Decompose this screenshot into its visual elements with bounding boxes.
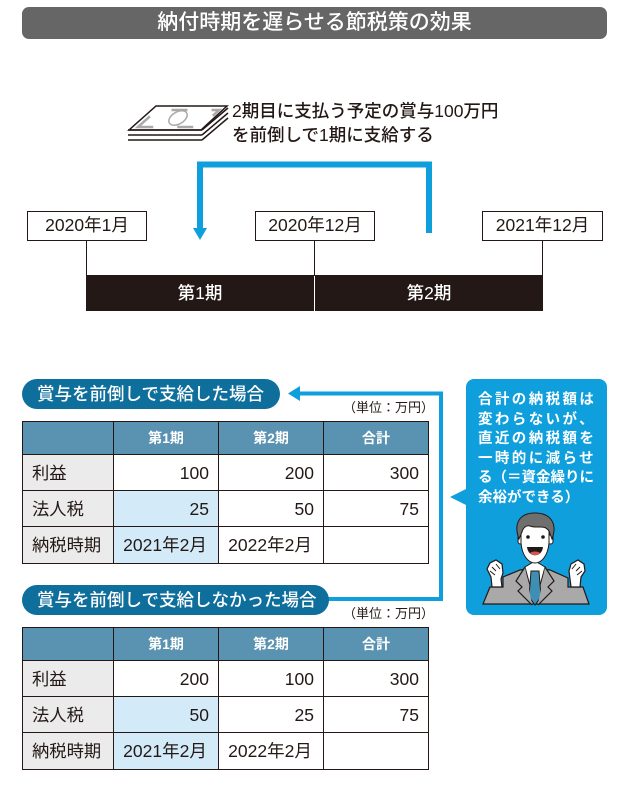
- row: profit: [23, 661, 113, 696]
- explanation text: を前倒しで1期に支給する: [232, 125, 434, 145]
- table: bonus not paid early: 200: [180, 669, 209, 689]
- unit note: （単位：万円）: [343, 606, 434, 621]
- table: bonus paid early: 第1期: [148, 430, 184, 446]
- row: payment date: 納税時期: [32, 535, 101, 555]
- callout tail: [450, 489, 466, 505]
- table: bonus not paid early: 合計: [362, 636, 390, 652]
- row: payment date: [23, 733, 113, 769]
- date: December 2020: [255, 211, 375, 241]
- date: January 2020: 2020年1月: [45, 215, 129, 235]
- table: bonus not paid early: 第1期: [148, 636, 184, 652]
- table: bonus paid early: 50: [295, 499, 314, 519]
- table: bonus paid early: 200: [285, 463, 314, 483]
- row: profit: 利益: [32, 669, 67, 689]
- period 2 bar: 第2期: [407, 283, 451, 303]
- heading: bonus paid early: 賞与を前倒しで支給した場合: [37, 384, 264, 404]
- title banner: 納付時期を遅らせる節税策の効果: [157, 11, 472, 34]
- table: bonus paid early: 75: [400, 499, 419, 519]
- connector arrow between the two tables: [288, 386, 443, 601]
- arrow: bonus moved from second period to first period: [193, 162, 432, 240]
- row: profit: 利益: [32, 463, 67, 483]
- table: bonus paid early: 2021年2月: [123, 535, 207, 555]
- table: bonus not paid early: [22, 627, 429, 770]
- heading: bonus not paid early: 賞与を前倒しで支給しなかった場合: [37, 590, 316, 610]
- row: corporate tax: 法人税: [32, 705, 84, 725]
- row: corporate tax: 法人税: [32, 499, 84, 519]
- table: bonus not paid early: 第2期: [253, 636, 289, 652]
- date: January 2020: [27, 211, 147, 241]
- title banner: [22, 7, 607, 39]
- row: profit: [23, 455, 113, 490]
- date: December 2021: 2021年12月: [496, 215, 589, 235]
- table: bonus not paid early: 2021年2月: [123, 741, 207, 761]
- table: bonus paid early: [22, 421, 429, 564]
- heading: bonus paid early: [22, 379, 280, 409]
- period 1 bar: 第1期: [178, 283, 222, 303]
- row: payment date: [23, 527, 113, 563]
- table: bonus not paid early: 2022年2月: [228, 741, 312, 761]
- callout panel: [450, 379, 607, 615]
- callout text: 直近の納税額を: [478, 431, 596, 447]
- period 1 bar: [86, 275, 314, 311]
- unit note: （単位：万円）: [343, 400, 434, 415]
- table: bonus paid early: 合計: [362, 430, 390, 446]
- date: December 2020: 2020年12月: [268, 215, 362, 235]
- callout text: 合計の納税額は: [478, 392, 596, 408]
- callout text: 余裕ができる）: [478, 490, 579, 506]
- callout text: [478, 391, 596, 506]
- row: corporate tax: [23, 697, 113, 732]
- icon: stack of banknotes: [127, 105, 229, 141]
- row: corporate tax: [23, 491, 113, 526]
- header row: [23, 628, 113, 660]
- header row: [23, 422, 113, 454]
- table: bonus not paid early: 75: [400, 705, 419, 725]
- table: bonus paid early: 2022年2月: [228, 535, 312, 555]
- table: bonus paid early: 25: [190, 499, 209, 519]
- period 2 bar: [315, 275, 543, 311]
- table: bonus paid early: 300: [390, 463, 419, 483]
- callout box: [466, 379, 607, 615]
- table: bonus not paid early: 25: [295, 705, 314, 725]
- icon: cheering businessman: [482, 512, 590, 606]
- explanation text: [232, 101, 498, 145]
- table: bonus paid early: 第2期: [253, 430, 289, 446]
- table: bonus not paid early: 300: [390, 669, 419, 689]
- date: December 2021: [482, 211, 603, 241]
- table: bonus not paid early: 100: [285, 669, 314, 689]
- heading: bonus not paid early: [22, 585, 329, 615]
- row: payment date: 納税時期: [32, 741, 101, 761]
- table: bonus not paid early: 50: [190, 705, 209, 725]
- table: bonus paid early: 100: [180, 463, 209, 483]
- callout text: る（＝資金繰りに: [478, 470, 594, 486]
- callout text: 変わらないが、: [478, 412, 596, 428]
- callout text: 一時的に減らせ: [478, 450, 596, 466]
- explanation text: 2期目に支払う予定の賞与100万円: [232, 101, 498, 121]
- timeline: [27, 211, 603, 311]
